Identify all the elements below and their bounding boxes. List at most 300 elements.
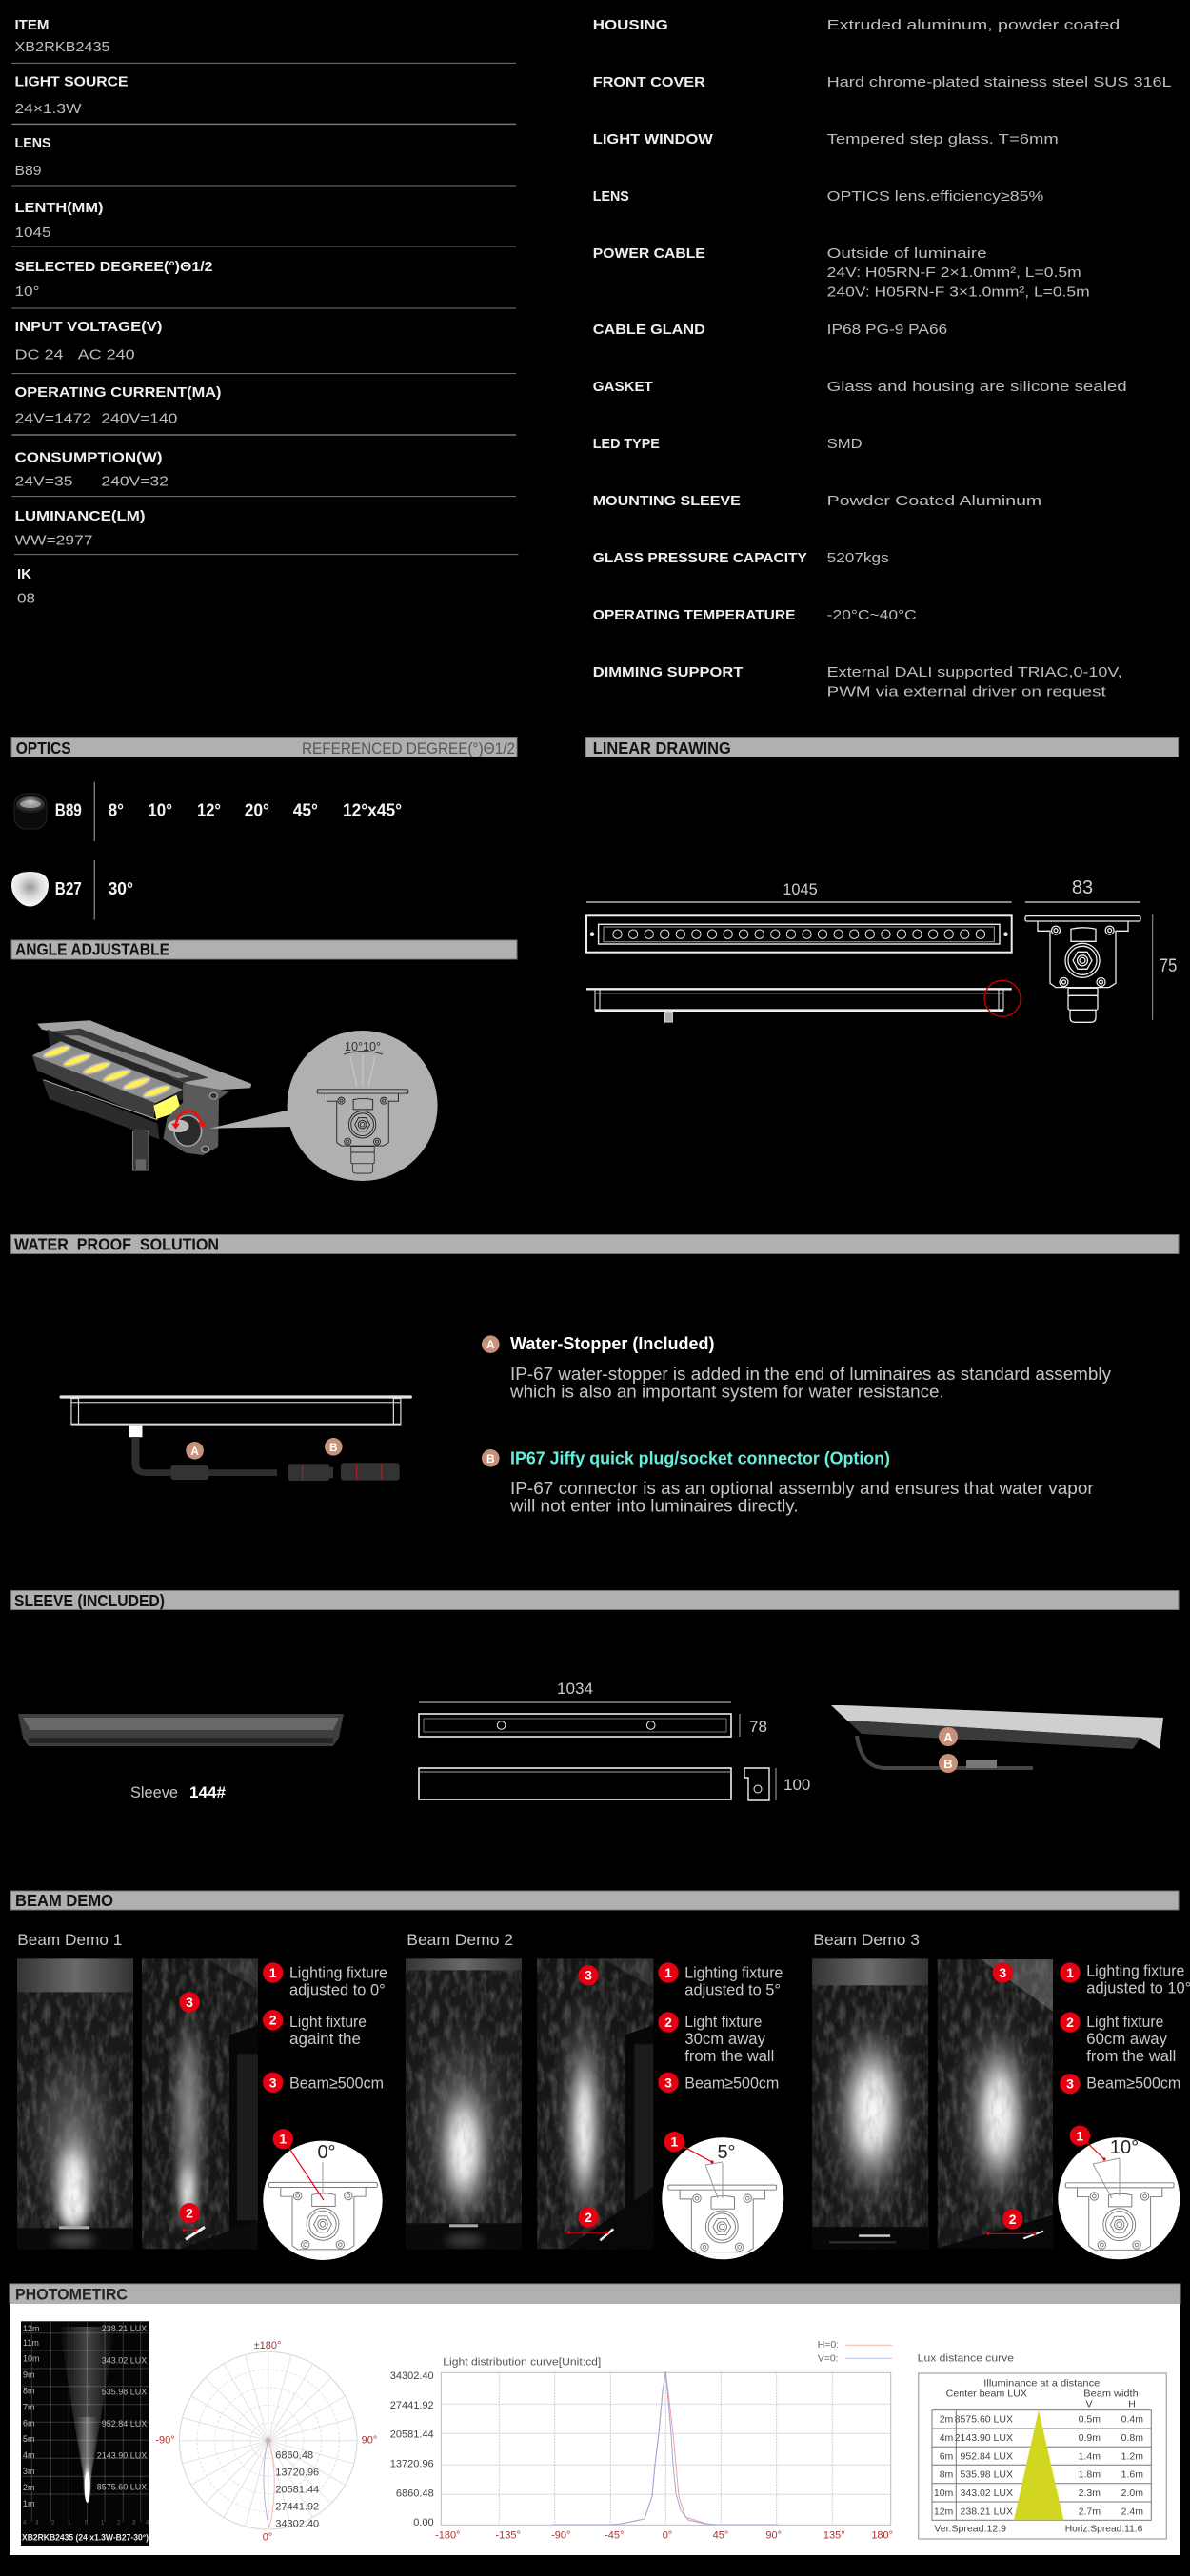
table rows: 0.8m: [1121, 2432, 1143, 2444]
spec row: length: 1045: [15, 225, 51, 241]
spec: light window: LIGHT WINDOW: [593, 131, 714, 147]
legend: demo 1 notes: 2: [269, 2013, 277, 2028]
table rows: 0.5m: [1079, 2414, 1101, 2426]
labels: x axis: 135°: [823, 2530, 845, 2542]
heading: water proof solution: WATER PROOF SOLUTION: [14, 1234, 219, 1253]
labels: horizontal scale: 3: [132, 2521, 136, 2527]
spec: dimming support: [593, 664, 1122, 700]
labels: polar intensity values: 13720.96: [275, 2467, 319, 2478]
dimension: width 83: 83: [1072, 877, 1093, 898]
spec row: item: XB2RKB2435: [15, 39, 109, 55]
legend: demo 2 notes: 3: [664, 2075, 672, 2090]
spec row: selected degree: SELECTED DEGREE(°)Θ1/2: [15, 259, 213, 275]
heading: optics: [11, 738, 517, 757]
legend: demo 2 notes: 1: [664, 1965, 672, 1980]
illustration: fixture with water stopper and connector: [60, 1395, 412, 1481]
spec: lens: [593, 188, 1043, 205]
labels: x axis: -45°: [605, 2530, 624, 2542]
table rows: 12m: [934, 2506, 954, 2517]
spec row: lens: [15, 135, 51, 179]
table rows: 0.9m: [1079, 2432, 1101, 2444]
spec: gasket: GASKET: [593, 379, 653, 395]
panel: beam demo 2: [406, 1931, 783, 2259]
table rows: 1.4m: [1079, 2450, 1101, 2462]
labels: y axis: 13720.96: [390, 2459, 434, 2470]
table rows: 952.84 LUX: [961, 2450, 1013, 2462]
spec: dimming support: DIMMING SUPPORT: [593, 664, 743, 680]
spec row: operating current: 24V=1472: [15, 411, 91, 426]
photo: demo 3 side view: [937, 1959, 1053, 2248]
heading: optics: REFERENCED DEGREE(°)Θ1/2: [302, 739, 515, 757]
legend: demo 1 notes: Lighting fixture: [289, 1963, 387, 1981]
legend: demo 2 notes: Lighting fixture: [684, 1963, 783, 1981]
labels: distance scale: 12m: [23, 2324, 40, 2333]
spec: lens: OPTICS lens.efficiency≥85%: [827, 188, 1043, 205]
drawing: sleeve dimensions: 1034: [557, 1680, 593, 1698]
labels: x axis: 0°: [663, 2530, 672, 2542]
table rows: 238.21 LUX: [961, 2506, 1013, 2517]
labels: polar intensity values: 20581.44: [275, 2485, 319, 2496]
table rows: 8m: [940, 2469, 954, 2481]
table title: Lux distance curve: [918, 2352, 1014, 2364]
panel: optics B27 row: B27: [55, 879, 82, 898]
spec: operating temperature: [593, 607, 917, 623]
legend: demo 2 notes: Beam≥500cm: [684, 2074, 779, 2092]
markers: demo 2 photo callouts: 3: [585, 1968, 592, 1983]
spec row: luminance: WW=2977: [15, 533, 93, 548]
icon: B27 lens: [11, 872, 49, 906]
labels: distance scale: 3m: [23, 2467, 35, 2476]
panel: beam demo 1: [17, 1931, 387, 2260]
markers: demo 3 photo callouts: 3: [999, 1965, 1006, 1980]
beam triangle: [1014, 2410, 1063, 2520]
labels: lux values: 2143.90 LUX: [97, 2450, 147, 2460]
panel: right specification list: [593, 17, 1172, 700]
spec: front cover: Hard chrome-plated stainess steel SUS 316L: [827, 74, 1172, 90]
callout: tilt angle detail: 10°10°: [345, 1039, 381, 1053]
spread values: [934, 2523, 1142, 2534]
labels: horizontal scale: 2: [117, 2521, 121, 2527]
spec row: light source: [15, 74, 128, 117]
label: sleeve model: 144#: [189, 1783, 227, 1801]
table rows: 10m: [934, 2488, 954, 2499]
spec row: selected degree: 10°: [15, 284, 40, 300]
spec: operating temperature: OPERATING TEMPERATURE: [593, 607, 796, 623]
labels: horizontal scale: [23, 2521, 149, 2527]
spec: dimming support: PWM via external driver on request: [827, 683, 1107, 700]
spec row: IK: 08: [17, 590, 35, 607]
labels: polar angles: [155, 2340, 377, 2543]
spec row: item: ITEM: [15, 17, 50, 33]
text block: water stopper: IP-67 water-stopper is added in the end of luminaires as standard assembly: [510, 1365, 1111, 1384]
text block: water stopper: Water-Stopper (Included): [510, 1334, 714, 1353]
table rows: 4m: [940, 2432, 954, 2444]
spec: mounting sleeve: [593, 493, 1041, 509]
table column headings: V: [1085, 2398, 1093, 2409]
labels: lux values: 952.84 LUX: [102, 2419, 147, 2429]
labels: horizontal scale: 4: [146, 2521, 149, 2527]
spec: LED type: LED TYPE: [593, 436, 660, 452]
spec row: input voltage: INPUT VOLTAGE(V): [15, 319, 162, 335]
labels: lux values: 238.21 LUX: [102, 2324, 147, 2333]
spec row: input voltage: AC 240: [78, 347, 135, 364]
panel: beam demo 3: Beam Demo 3: [813, 1931, 920, 1949]
table rows: 1.2m: [1121, 2450, 1143, 2462]
spec row: input voltage: DC 24: [15, 347, 63, 364]
table column headings: H: [1128, 2398, 1136, 2409]
panel: optics B89 row: [14, 782, 402, 841]
labels: horizontal scale: 1: [101, 2521, 105, 2527]
table rows: 2m: [940, 2414, 954, 2426]
spec: dimming support: External DALI supported TRIAC,0-10V,: [827, 664, 1122, 680]
spec: glass pressure capacity: 5207kgs: [827, 550, 889, 566]
dimension: length 1045: 1045: [783, 880, 818, 898]
text block: IP67 connector: B: [486, 1452, 495, 1465]
table rows: 343.02 LUX: [961, 2488, 1013, 2499]
legend: demo 1 notes: againt the: [289, 2030, 361, 2048]
illustration: sleeve installed with connectors: [831, 1705, 1163, 1773]
spec row: IK: IK: [17, 566, 31, 582]
table rows: [934, 2414, 1143, 2517]
labels: polar angles: 90°: [362, 2434, 377, 2446]
spec: power cable: [593, 246, 1090, 301]
legend: demo 2 notes: 2: [664, 2015, 672, 2030]
spec row: consumption: CONSUMPTION(W): [15, 450, 162, 466]
panel: optics B27 row: 30°: [109, 879, 133, 898]
drawing: sleeve dimensions: [419, 1680, 810, 1800]
markers: demo 3 photo callouts: [986, 1962, 1036, 2235]
markers: demo 3 photo callouts: 2: [1009, 2212, 1017, 2227]
text block: IP67 connector: IP67 Jiffy quick plug/socket connector (Option): [510, 1449, 890, 1468]
table rows: 535.98 LUX: [961, 2469, 1013, 2481]
spec: power cable: Outside of luminaire: [827, 246, 987, 262]
spec: housing: [593, 17, 1120, 33]
table column headings: Beam width: [1083, 2389, 1139, 2400]
labels: distance scale: [23, 2324, 40, 2508]
legend: demo 3 notes: Light fixture: [1086, 2013, 1163, 2031]
spec row: consumption: [15, 450, 169, 489]
label: sleeve model: [130, 1783, 227, 1801]
labels: y axis: [390, 2370, 434, 2528]
markers: demo 1 photo callouts: [179, 1992, 200, 2232]
labels: distance scale: 11m: [23, 2338, 39, 2348]
legend: demo 1 notes: Beam≥500cm: [289, 2074, 384, 2092]
illustration: tilted fixture 3D view: [32, 1020, 251, 1171]
heading: linear drawing: [585, 738, 1179, 757]
badge: B: B: [943, 1757, 953, 1771]
drawing: top view with 24 LEDs: [586, 915, 1012, 953]
photo: demo 1 side view: [142, 1958, 258, 2250]
spec: light window: Tempered step glass. T=6mm: [827, 131, 1059, 147]
spec row: length: LENTH(MM): [15, 200, 104, 216]
labels: lux values: 8575.60 LUX: [97, 2483, 147, 2492]
table rows: 1.8m: [1079, 2469, 1101, 2481]
panel: beam demo 1: Beam Demo 1: [17, 1931, 122, 1949]
spec row: input voltage: [15, 319, 162, 364]
spread values: Ver.Spread:12.9: [934, 2523, 1006, 2534]
label: model caption: XB2RKB2435 (24 x1.3W-B27-30°): [22, 2532, 149, 2543]
spec: front cover: [593, 74, 1172, 90]
labels: horizontal scale: 3: [35, 2521, 39, 2527]
table rows: 2.3m: [1079, 2488, 1101, 2499]
labels: distance scale: 6m: [23, 2418, 35, 2428]
dimension: height 75: [1153, 914, 1177, 1020]
legend: [818, 2339, 892, 2364]
legend: V=0:: [818, 2352, 839, 2364]
panel: optics B89 row: 12°x45°: [343, 801, 402, 820]
chart: linear dimension drawing: [586, 877, 1177, 1022]
spec row: length: [15, 200, 104, 241]
labels: distance scale: 8m: [23, 2386, 35, 2395]
labels: x axis: -135°: [495, 2530, 521, 2542]
legend: demo 3 notes: 2: [1066, 2015, 1074, 2030]
callout: tilt angle detail: [209, 1031, 438, 1181]
markers: demo 2 photo callouts: [567, 1965, 608, 2234]
text block: IP67 connector: IP-67 connector is as an optional assembly and ensures that water vapor: [510, 1479, 1094, 1498]
legend: demo 1 notes: Light fixture: [289, 2013, 367, 2031]
dimension: height 75: 75: [1160, 956, 1177, 976]
spec row: luminance: LUMINANCE(LM): [15, 508, 146, 524]
spec: mounting sleeve: Powder Coated Aluminum: [827, 493, 1041, 509]
panel: photometric white background: [10, 2304, 1180, 2555]
labels: distance scale: 1m: [23, 2499, 35, 2508]
spec: power cable: 24V: H05RN-F 2×1.0mm², L=0.5m: [827, 265, 1081, 281]
detail: 0 degree gauge: [263, 2129, 383, 2260]
spec row: operating current: OPERATING CURRENT(MA): [15, 384, 222, 401]
legend: demo 3 notes: from the wall: [1086, 2047, 1176, 2065]
spec: cable gland: IP68 PG-9 PA66: [827, 322, 947, 338]
spec: LED type: [593, 436, 863, 452]
labels: y axis: 6860.48: [396, 2488, 434, 2499]
table rows: 1.6m: [1121, 2469, 1143, 2481]
legend: demo 3 notes: 60cm away: [1086, 2030, 1167, 2048]
heading: photometric: [10, 2284, 1180, 2304]
heading: linear drawing: LINEAR DRAWING: [593, 738, 731, 757]
legend: demo 2 notes: 30cm away: [684, 2030, 765, 2048]
spec row: light source: 24×1.3W: [15, 101, 82, 117]
table grid: [932, 2410, 1151, 2520]
markers: demo 2 photo callouts: 2: [585, 2210, 592, 2225]
labels: polar intensity values: 34302.40: [275, 2519, 319, 2530]
heading: water proof solution: [11, 1234, 1179, 1254]
legend: demo 3 notes: Beam≥500cm: [1086, 2074, 1180, 2092]
labels: y axis: 20581.44: [390, 2429, 434, 2441]
labels: polar intensity values: 27441.92: [275, 2502, 319, 2513]
labels: x axis: [435, 2530, 893, 2542]
legend: demo 3 notes: Lighting fixture: [1086, 1961, 1184, 1979]
labels: horizontal scale: 0: [85, 2521, 89, 2527]
spec: gasket: Glass and housing are silicone sealed: [827, 379, 1127, 395]
table rows: 2143.90 LUX: [955, 2432, 1013, 2444]
curve: V=0: [552, 2372, 778, 2525]
text block: IP67 connector: will not enter into luminaires directly.: [509, 1497, 799, 1516]
spec: power cable: 240V: H05RN-F 3×1.0mm², L=0.5m: [827, 285, 1090, 301]
detail: 5 degree gauge: 1: [670, 2134, 678, 2150]
photo: demo 2 side view: [537, 1958, 653, 2250]
legend: demo 2 notes: Light fixture: [684, 2013, 762, 2031]
badge: A on cable: A: [190, 1445, 199, 1458]
text block: water stopper: [482, 1334, 1111, 1402]
detail: 5 degree gauge: [662, 2132, 783, 2259]
labels: distance scale: 7m: [23, 2402, 35, 2411]
table rows: 2.7m: [1079, 2506, 1101, 2517]
labels: x axis: -180°: [435, 2530, 461, 2542]
heading: angle adjustable: ANGLE ADJUSTABLE: [15, 940, 169, 959]
panel: optics B89 row: 12°: [197, 801, 221, 820]
legend: demo 2 notes: [658, 1962, 783, 2093]
heading: sleeve included: SLEEVE (INCLUDED): [14, 1591, 165, 1610]
badge: B: [939, 1754, 958, 1773]
photo: demo 3 front view: [812, 1958, 929, 2250]
badge: B on connector: [325, 1438, 343, 1456]
drawing: cross section: [1025, 916, 1140, 1022]
labels: x axis: -90°: [551, 2530, 570, 2542]
labels: x axis: 180°: [871, 2530, 893, 2542]
spec row: item: [15, 17, 109, 55]
labels: distance scale: 5m: [23, 2434, 35, 2444]
spec: mounting sleeve: MOUNTING SLEEVE: [593, 493, 741, 509]
detail: 10 degree gauge: 1: [1076, 2128, 1083, 2143]
spec row: selected degree: [15, 259, 213, 300]
spec: operating temperature: -20°C~40°C: [827, 607, 917, 623]
label: sleeve model: Sleeve: [130, 1783, 178, 1801]
spec row: operating current: 240V=140: [101, 411, 177, 426]
labels: distance scale: 10m: [23, 2354, 40, 2364]
chart: illuminance distance image: [21, 2321, 149, 2546]
text block: IP67 connector: [482, 1449, 1094, 1516]
table column headings: Illuminance at a distance: [983, 2377, 1100, 2389]
labels: y axis: 27441.92: [390, 2400, 434, 2411]
labels: polar intensity values: [275, 2449, 319, 2530]
labels: horizontal scale: 2: [51, 2521, 55, 2527]
spec: LED type: SMD: [827, 436, 863, 452]
detail: 10 degree gauge: 10°: [1110, 2137, 1139, 2158]
labels: polar angles: ±180°: [254, 2340, 281, 2351]
spec: housing: HOUSING: [593, 17, 668, 33]
spec: housing: Extruded aluminum, powder coated: [827, 17, 1120, 33]
labels: polar angles: -90°: [155, 2434, 175, 2446]
spec: front cover: FRONT COVER: [593, 74, 705, 90]
labels: horizontal scale: 4: [23, 2521, 27, 2527]
table rows: 8575.60 LUX: [955, 2414, 1013, 2426]
heading: beam demo: [11, 1891, 1179, 1910]
spec row: consumption: 240V=32: [101, 473, 169, 489]
labels: lux values: 535.98 LUX: [102, 2388, 147, 2397]
legend: demo 1 notes: 1: [269, 1965, 277, 1980]
spec row: luminance: [15, 508, 146, 548]
spec row: lens: B89: [15, 163, 42, 179]
legend: demo 2 notes: from the wall: [684, 2047, 774, 2065]
spec row: lens: LENS: [15, 135, 51, 151]
panel: beam demo 3: [812, 1931, 1190, 2259]
table rows: 2.0m: [1121, 2488, 1143, 2499]
spec: cable gland: CABLE GLAND: [593, 322, 705, 338]
table rows: 2.4m: [1121, 2506, 1143, 2517]
table rows: 0.4m: [1121, 2414, 1143, 2426]
spread values: Horiz.Spread:11.6: [1065, 2523, 1142, 2534]
labels: polar intensity values: 6860.48: [275, 2449, 313, 2461]
labels: polar angles: 0°: [263, 2531, 272, 2543]
panel: optics B89 row: 45°: [293, 801, 318, 820]
spec: glass pressure capacity: GLASS PRESSURE CAPACITY: [593, 550, 807, 566]
labels: distance scale: 9m: [23, 2370, 35, 2379]
legend: demo 3 notes: [1060, 1961, 1190, 2094]
labels: y axis: 0.00: [413, 2517, 434, 2528]
spec: cable gland: [593, 322, 947, 338]
spec: lens: LENS: [593, 188, 629, 205]
legend: demo 1 notes: adjusted to 0°: [289, 1980, 386, 1998]
photo: demo 1 front view: [17, 1958, 133, 2250]
spec: light window: [593, 131, 1059, 147]
highlight: red end ring: [984, 980, 1021, 1016]
curve: H=0: [622, 2371, 709, 2525]
chart: polar light distribution: [155, 2340, 377, 2543]
legend: demo 1 notes: 3: [269, 2075, 277, 2090]
labels: y axis: 34302.40: [390, 2370, 434, 2382]
icon: B89 lens: [14, 794, 47, 829]
labels: distance scale: 2m: [23, 2483, 35, 2492]
badge: A on cable: [186, 1442, 204, 1460]
drawing: sleeve dimensions: 100: [783, 1776, 810, 1794]
table column headings: [946, 2377, 1139, 2409]
labels: lux values: [97, 2324, 147, 2492]
heading: angle adjustable: [11, 940, 517, 959]
chart: lux distance table: [918, 2352, 1166, 2539]
panel: optics B27 row: [11, 860, 133, 920]
legend: H=0:: [818, 2339, 839, 2350]
detail: 0 degree gauge: 1: [279, 2132, 287, 2147]
chart title: Light distribution curve[Unit:cd]: [443, 2356, 601, 2368]
illustration: sleeve 3D: [18, 1714, 344, 1746]
text block: water stopper: which is also an important system for water resistance.: [509, 1383, 944, 1402]
chart: light distribution curve: [390, 2339, 893, 2542]
spec: gasket: [593, 379, 1127, 395]
labels: lux values: 343.02 LUX: [102, 2355, 147, 2365]
badge: B on connector: B: [329, 1441, 338, 1454]
badge: A: A: [943, 1730, 953, 1744]
dimension: width 83: [1025, 877, 1140, 902]
labels: x axis: 90°: [765, 2530, 782, 2542]
spec: power cable: POWER CABLE: [593, 246, 705, 262]
spec row: IK: [17, 566, 35, 607]
table column headings: Center beam LUX: [946, 2389, 1027, 2400]
panel: optics B89 row: 8°: [109, 801, 124, 820]
labels: x axis: 45°: [713, 2530, 728, 2542]
labels: horizontal scale: 1: [68, 2521, 71, 2527]
heading: beam demo: BEAM DEMO: [15, 1891, 113, 1910]
detail: 5 degree gauge: 5°: [717, 2142, 736, 2163]
table rows: 6m: [940, 2450, 954, 2462]
heading: photometric: PHOTOMETIRC: [15, 2286, 128, 2304]
markers: demo 1 photo callouts: 3: [186, 1995, 193, 2010]
markers: demo 1 photo callouts: 2: [186, 2206, 193, 2221]
panel: left specification list: [11, 17, 518, 607]
panel: optics B89 row: 10°: [148, 801, 172, 820]
panel: optics B89 row: 20°: [245, 801, 269, 820]
legend: demo 1 notes: [263, 1962, 387, 2093]
spec row: consumption: 24V=35: [15, 473, 72, 489]
panel: beam demo 2: Beam Demo 2: [407, 1931, 513, 1949]
photo: demo 2 front view: [406, 1958, 522, 2250]
drawing: sleeve dimensions: 78: [749, 1718, 767, 1736]
legend: demo 3 notes: 3: [1066, 2076, 1074, 2092]
badge: A: [939, 1727, 958, 1746]
text block: water stopper: A: [486, 1338, 495, 1351]
legend: demo 3 notes: 1: [1066, 1965, 1074, 1980]
panel: optics B89 row: B89: [55, 801, 82, 820]
legend: demo 2 notes: adjusted to 5°: [684, 1980, 781, 1998]
spec row: light source: LIGHT SOURCE: [15, 74, 128, 90]
